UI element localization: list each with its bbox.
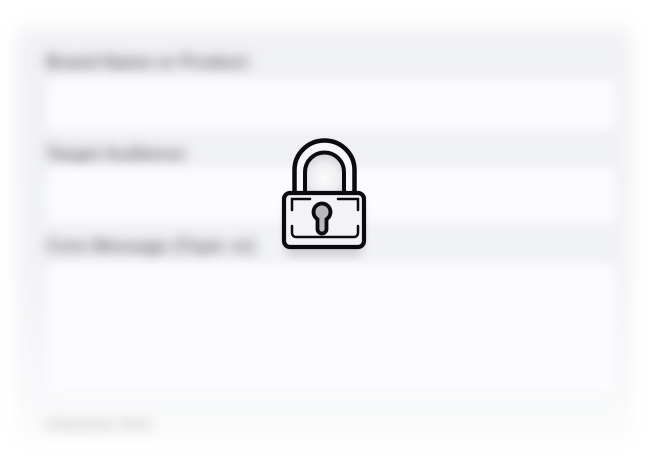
input: first field (48, 79, 615, 130)
input: second field (48, 168, 615, 222)
lock body (284, 193, 364, 247)
input: third large field (48, 264, 615, 392)
inner corner brackets (292, 199, 358, 237)
heading: first field label: Brand Name or Product (46, 52, 248, 72)
shackle (294, 140, 354, 192)
heading: third field label: Core Message (Topic or) (46, 236, 255, 256)
keyhole (314, 204, 330, 234)
icon: padlock (282, 138, 366, 260)
text block: footer label: Character limit (46, 416, 151, 433)
heading: second field label: Target Audience (46, 144, 185, 164)
lock shadow (285, 200, 363, 256)
